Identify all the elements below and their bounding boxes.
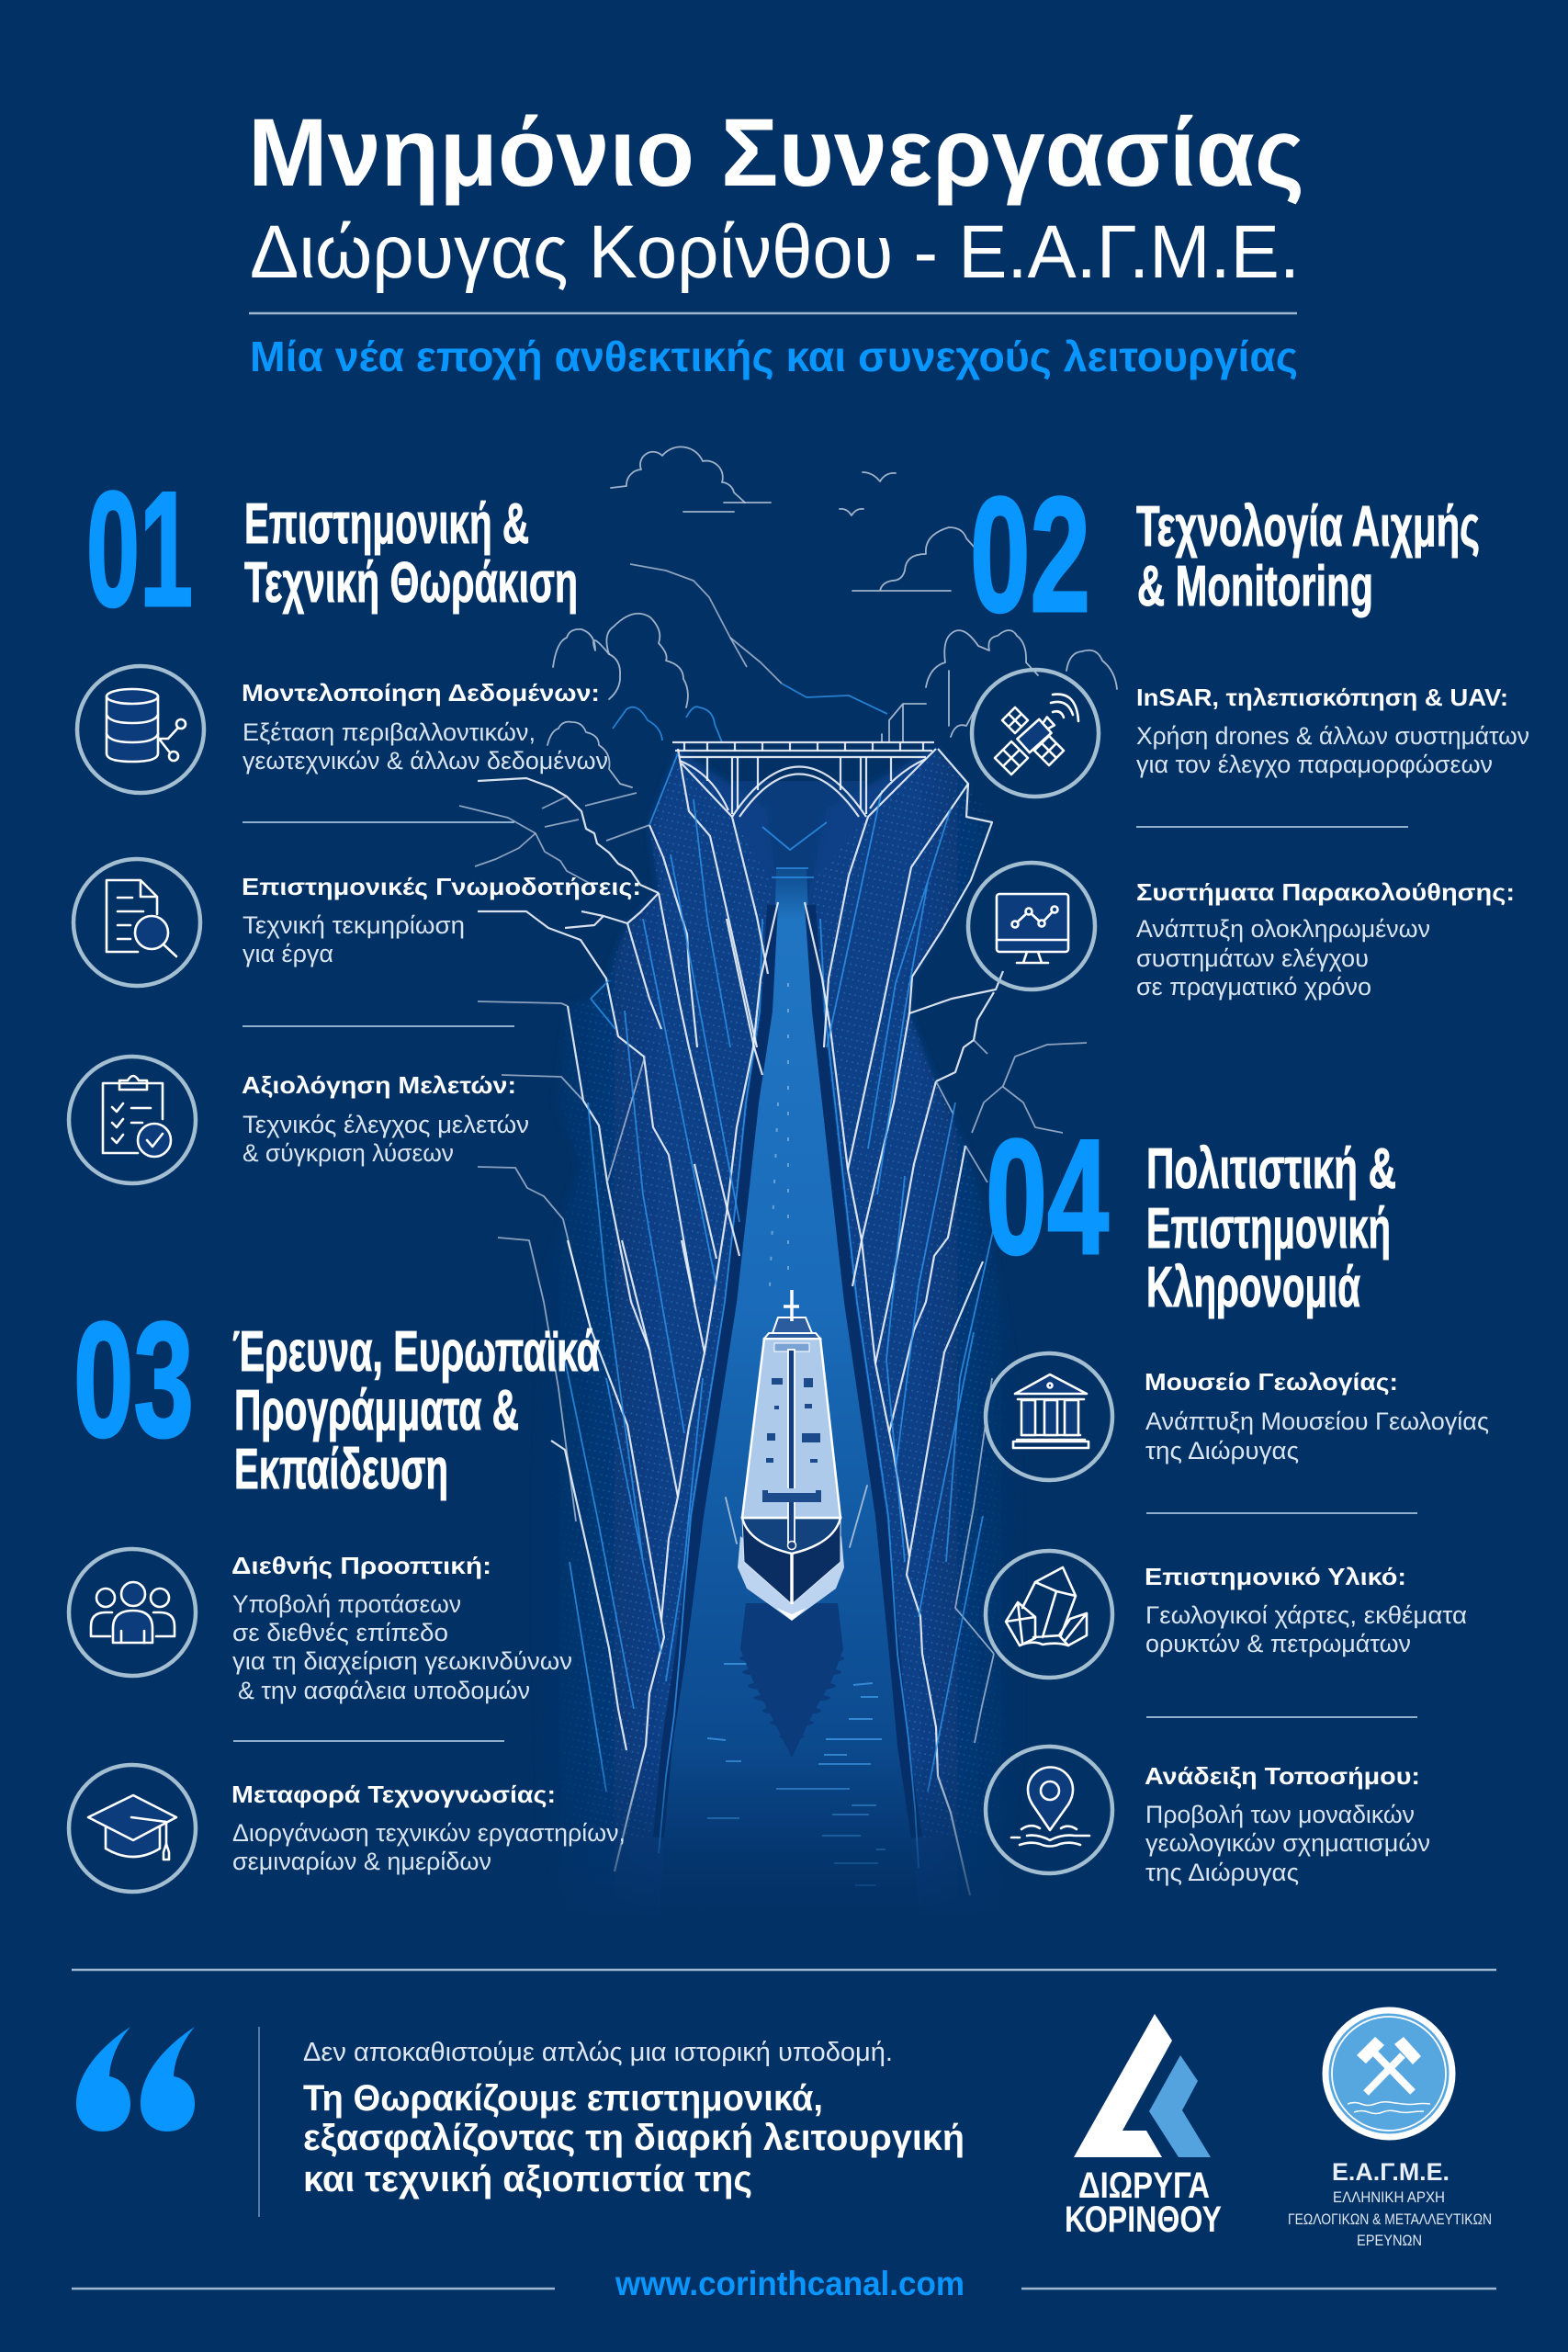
item: InSAR (1136, 684, 1529, 778)
heading 02 (1136, 495, 1480, 618)
item: international perspective: Διεθνής Προοπτική: (231, 1552, 491, 1579)
heading 01 (244, 492, 578, 615)
item: know-how transfer: Διοργάνωση τεχνικών εργαστηρίων, (232, 1819, 626, 1847)
clouds, birds and mountain outline (611, 447, 975, 714)
item: scientific material: Γεωλογικοί χάρτες, εκθέματα (1145, 1601, 1467, 1629)
item: landmark promotion: Ανάδειξη Τοποσήμου: (1145, 1762, 1420, 1790)
item: geology museum: Μουσείο Γεωλογίας: (1145, 1368, 1398, 1396)
item: scientific opinions: Τεχνική τεκμηρίωση (243, 911, 465, 939)
item: landmark promotion: Προβολή των μοναδικών (1145, 1801, 1415, 1828)
icon: database (77, 666, 204, 793)
number 01: 01 (86, 458, 193, 640)
quote text: Τη Θωρακίζουμε επιστημονικά, (303, 2078, 823, 2119)
heading 03: Έρευνα, Ευρωπαϊκά (232, 1320, 600, 1384)
icon: quotation marks (76, 2027, 195, 2132)
tagline: Μία νέα εποχή ανθεκτικής και συνεχούς λειτουργίας (250, 333, 1298, 380)
item: data modelling: γεωτεχνικών & άλλων δεδομένων (243, 747, 608, 775)
item: know-how transfer (231, 1781, 626, 1875)
icon: satellite (972, 670, 1099, 797)
icon: crystals (986, 1551, 1112, 1678)
item: studies evaluation: Αξιολόγηση Μελετών: (242, 1071, 516, 1099)
item: monitoring systems: Ανάπτυξη ολοκληρωμένων (1136, 915, 1430, 943)
bridge (672, 742, 934, 877)
item: InSAR: Χρήση drones & άλλων συστημάτων (1136, 722, 1529, 750)
item: monitoring systems (1136, 878, 1515, 1001)
heading 03 (232, 1320, 600, 1501)
item: studies evaluation (242, 1071, 529, 1167)
sub heading: Διώρυγας Κορίνθου - Ε.Α.Γ.Μ.Ε. (250, 210, 1300, 294)
logo: Corinth Canal: ΚΟΡΙΝΘΟΥ (1065, 2199, 1222, 2240)
icon: monitor chart (968, 863, 1095, 989)
number 02: 02 (970, 463, 1090, 646)
heading 01: Επιστημονική & (244, 492, 529, 556)
heading 01: Τεχνική Θωράκιση (244, 551, 578, 615)
title (248, 99, 1304, 380)
logo: E.A.G.M.E.: ΕΡΕΥΝΩΝ (1357, 2232, 1422, 2249)
item: geology museum: Ανάπτυξη Μουσείου Γεωλογίας (1145, 1408, 1489, 1435)
item: geology museum: της Διώρυγας (1145, 1437, 1299, 1464)
item: landmark promotion: γεωλογικών σχηματισμών (1145, 1829, 1430, 1857)
icon: museum (986, 1353, 1112, 1480)
logo: E.A.G.M.E.: ΕΛΛΗΝΙΚΗ ΑΡΧΗ (1333, 2188, 1445, 2206)
ship (726, 1290, 867, 1621)
item: scientific material: Επιστημονικό Υλικό: (1145, 1563, 1406, 1590)
item: studies evaluation: Τεχνικός έλεγχος μελετών (243, 1111, 529, 1138)
item: international perspective (231, 1552, 572, 1704)
trees on canal rims (547, 614, 1117, 787)
heading 04: Επιστημονική (1146, 1197, 1391, 1261)
quote text: και τεχνική αξιοπιστία της (303, 2159, 752, 2199)
item: studies evaluation: & σύγκριση λύσεων (243, 1139, 454, 1167)
quote text (303, 2038, 964, 2199)
heading 04: Πολιτιστική & (1146, 1137, 1396, 1201)
heading 03: Εκπαίδευση (234, 1438, 448, 1501)
panel: section 02 (968, 463, 1529, 1001)
bottom fade of illustration (496, 1746, 1084, 1966)
logo: E.A.G.M.E.: Ε.Α.Γ.Μ.Ε. (1332, 2158, 1450, 2186)
item: monitoring systems: συστημάτων ελέγχου (1136, 944, 1369, 972)
panel: section 03 (69, 1288, 626, 1892)
panel: quote (76, 2027, 964, 2217)
quote text: Δεν αποκαθιστούμε απλώς μια ιστορική υποδομή. (303, 2038, 893, 2067)
item: InSAR: για τον έλεγχο παραμορφώσεων (1136, 751, 1493, 778)
icon: map pin with water (986, 1747, 1112, 1873)
water ripples (707, 983, 886, 1885)
illustration: Corinth canal with bridge and ship (459, 447, 1117, 1966)
canal water (659, 868, 921, 1929)
number 04: 04 (986, 1105, 1109, 1288)
item: monitoring systems: Συστήματα Παρακολούθησης: (1136, 878, 1515, 906)
item: scientific material (1145, 1563, 1467, 1657)
panel: section 01 (69, 458, 641, 1183)
heading 03: Προγράμματα & (234, 1379, 519, 1442)
item: data modelling (242, 679, 608, 775)
distant gorge under bridge (732, 781, 866, 905)
item: scientific opinions: για έργα (243, 940, 333, 967)
item: InSAR: InSAR, τηλεπισκόπηση & UAV: (1136, 684, 1508, 711)
item: scientific material: ορυκτών & πετρωμάτων (1145, 1630, 1411, 1657)
footer website: www.corinthcanal.com (615, 2265, 964, 2302)
ship reflection (739, 1603, 844, 1758)
icon: clipboard check (69, 1057, 196, 1183)
number 03: 03 (73, 1288, 194, 1471)
logo: E.A.G.M.E.: ΓΕΩΛΟΓΙΚΩΝ & ΜΕΤΑΛΛΕΥΤΙΚΩΝ (1288, 2211, 1492, 2228)
item: international perspective: για τη διαχείριση γεωκινδύνων (232, 1647, 572, 1675)
logo: Corinth Canal (1065, 2014, 1222, 2240)
rock outlines right (805, 749, 1087, 1895)
quote text: εξασφαλίζοντας τη διαρκή λειτουργική (303, 2118, 964, 2158)
dark and bright canal edges (659, 905, 919, 1868)
item: data modelling: Εξέταση περιβαλλοντικών, (243, 718, 536, 746)
item: scientific opinions (242, 873, 641, 967)
item: geology museum (1145, 1368, 1489, 1464)
logo: Corinth Canal: ΔΙΩΡΥΓΑ (1078, 2165, 1210, 2206)
heading 04: Κληρονομιά (1146, 1256, 1360, 1319)
item: international perspective: Υποβολή προτάσεων (232, 1590, 461, 1618)
rock outlines left (459, 749, 778, 1871)
heading 04 (1146, 1137, 1396, 1319)
icon: document search (73, 859, 200, 986)
item: know-how transfer: σεμιναρίων & ημερίδων (232, 1848, 491, 1875)
item: landmark promotion: της Διώρυγας (1145, 1859, 1299, 1886)
cliffs (537, 747, 1020, 1916)
item: know-how transfer: Μεταφορά Τεχνογνωσίας: (231, 1781, 556, 1808)
item: landmark promotion (1145, 1762, 1430, 1886)
item: scientific opinions: Επιστημονικές Γνωμοδοτήσεις: (242, 873, 641, 900)
item: international perspective: & την ασφάλεια υποδομών (238, 1677, 530, 1704)
logo: E.A.G.M.E. (1288, 2010, 1492, 2249)
icon: people (69, 1549, 196, 1676)
icon: graduation cap (69, 1765, 196, 1892)
item: monitoring systems: σε πραγματικό χρόνο (1136, 973, 1371, 1001)
heading 02: & Monitoring (1137, 555, 1373, 618)
item: data modelling: Μοντελοποίηση Δεδομένων: (242, 679, 600, 707)
item: international perspective: σε διεθνές επίπεδο (232, 1619, 448, 1646)
main heading: Μνημόνιο Συνεργασίας (248, 99, 1304, 207)
panel: section 04 (986, 1105, 1489, 1886)
